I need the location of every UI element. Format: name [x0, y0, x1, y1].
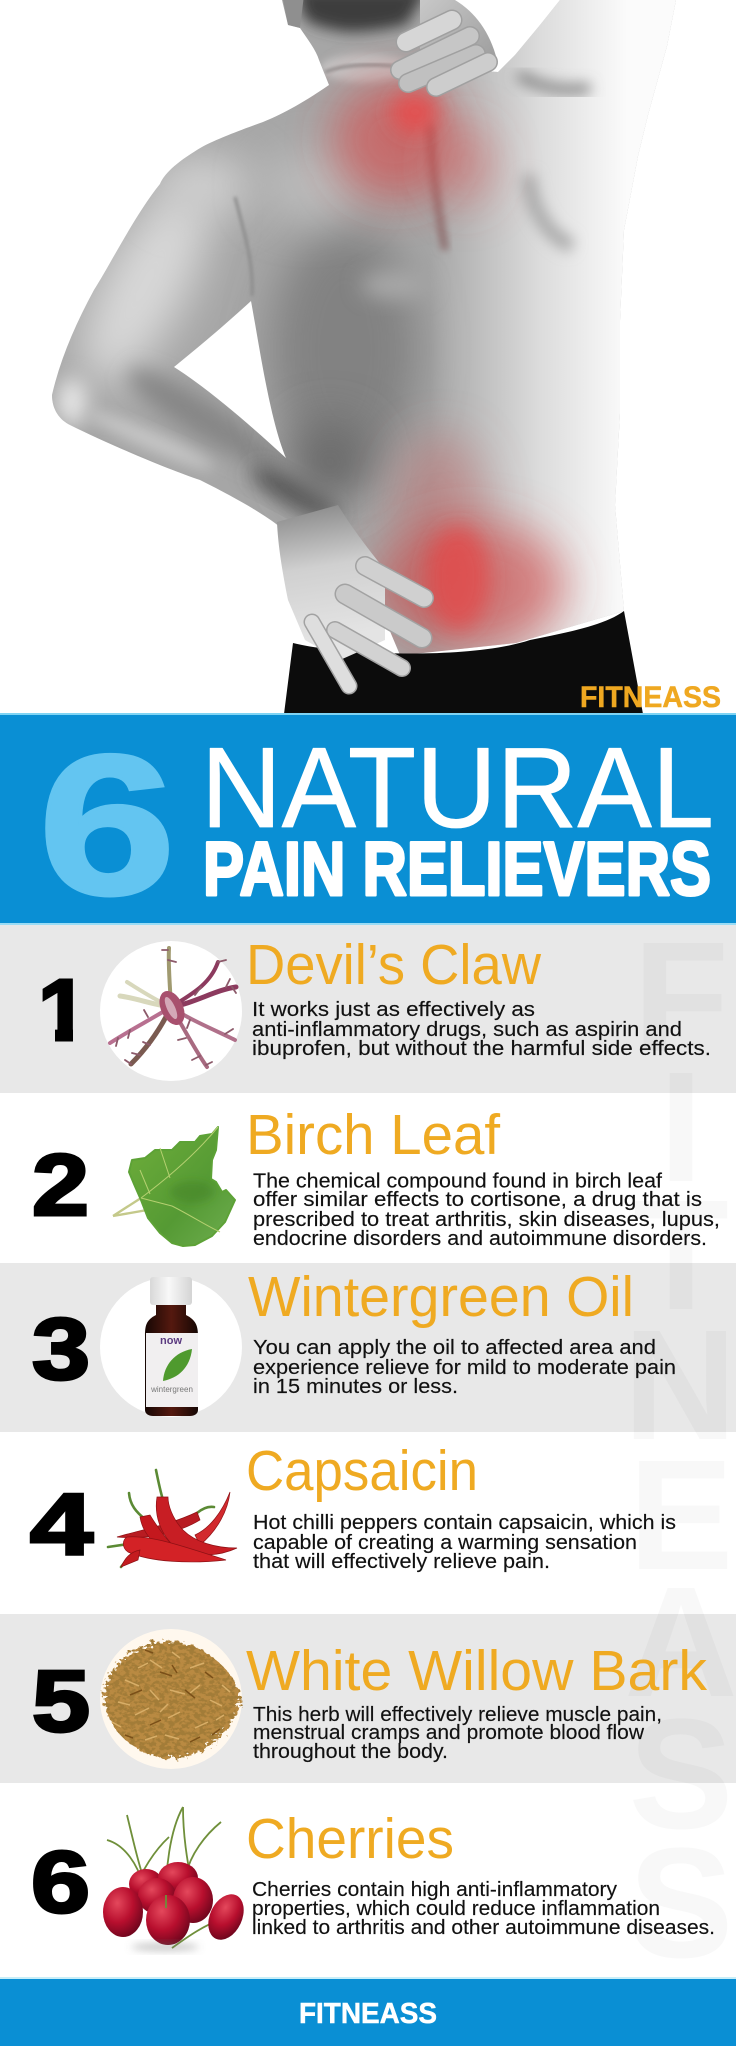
description: linked to arthritis and other autoimmune diseases.	[252, 1916, 715, 1939]
icon: red chilli peppers	[108, 1470, 237, 1567]
description: This herb will effectively relieve muscle pain,	[253, 1703, 662, 1726]
background vertical watermark letters: A	[624, 1555, 736, 1730]
row band 1	[0, 925, 736, 1093]
item 1: Devil's Claw	[26, 933, 711, 1081]
description: properties, which could reduce inflammation	[252, 1897, 660, 1920]
icon: wintergreen oil bottle	[100, 1277, 242, 1417]
background vertical watermark letters: E	[629, 1428, 733, 1603]
photo: upper hand on neck	[400, 0, 497, 87]
title: Devil’s Claw	[246, 933, 542, 997]
description: throughout the body.	[253, 1740, 448, 1763]
description: menstrual cramps and promote blood flow	[253, 1721, 644, 1744]
photo: black trousers	[284, 611, 643, 714]
description: The chemical compound found in birch leaf	[253, 1170, 662, 1192]
item 6: Cherries	[31, 1807, 715, 1951]
row band 5	[0, 1614, 736, 1783]
title: Birch Leaf	[246, 1103, 500, 1167]
item 4: Capsaicin	[30, 1439, 676, 1573]
icon: devil's claw plant	[100, 941, 242, 1081]
description: capable of creating a warming sensation	[253, 1531, 637, 1554]
watermark brand top right: FITNEASS	[580, 681, 721, 714]
icon: cherries	[103, 1807, 251, 1951]
description: offer similar effects to cortisone, a drug that is	[253, 1188, 702, 1211]
title: Wintergreen Oil	[248, 1265, 634, 1329]
number 1: 1	[38, 962, 88, 1059]
description: endocrine disorders and autoimmune disorders.	[253, 1227, 707, 1250]
number 5: 5	[32, 1653, 90, 1750]
background vertical watermark letters: S	[629, 1816, 733, 1991]
description	[253, 1170, 720, 1250]
item 2: Birch Leaf	[32, 1103, 720, 1250]
description: in 15 minutes or less.	[253, 1375, 458, 1398]
footer brand: FITNEASS	[299, 1998, 437, 2030]
background vertical watermark letters: S	[629, 1687, 733, 1862]
description	[253, 1703, 662, 1763]
description: You can apply the oil to affected area and	[253, 1336, 656, 1359]
description: It works just as effectively as	[252, 998, 535, 1021]
background vertical watermark letters: T	[633, 1168, 729, 1343]
background vertical watermark letters: I	[659, 1040, 703, 1215]
title: Cherries	[246, 1807, 454, 1871]
photo: lower hand on back	[277, 505, 424, 686]
background vertical watermark letters: F	[633, 910, 729, 1085]
icon: wintergreen oil bottle: now	[160, 1335, 182, 1347]
panel: blue title banner	[0, 713, 736, 937]
description	[253, 1336, 676, 1398]
number 3: 3	[32, 1301, 90, 1398]
description: that will effectively relieve pain.	[253, 1550, 550, 1573]
photo: gap between arm and torso	[174, 301, 286, 458]
item 5: White Willow Bark	[32, 1629, 707, 1769]
description: prescribed to treat arthritis, skin diseases, lupus,	[253, 1208, 720, 1231]
row band 3	[0, 1263, 736, 1432]
icon: birch leaf	[113, 1127, 235, 1246]
panel: blue footer	[0, 1977, 736, 2046]
big six: 6	[38, 714, 176, 937]
item 3: Wintergreen Oil	[32, 1265, 676, 1417]
photo: body with shading and red pain areas	[52, 0, 676, 654]
description	[252, 998, 711, 1060]
description: Cherries contain high anti-inflammatory	[252, 1878, 618, 1901]
hero photo: man holding his back	[40, 0, 690, 720]
heading: natural: NATURAL	[201, 725, 714, 852]
description	[253, 1511, 676, 1573]
description: anti-inflammatory drugs, such as aspirin and	[252, 1018, 682, 1041]
description: experience relieve for mild to moderate pain	[253, 1356, 676, 1379]
icon: willow bark pile	[100, 1629, 242, 1769]
background vertical watermark letters	[623, 910, 736, 1991]
description	[252, 1878, 715, 1939]
title: Capsaicin	[246, 1439, 478, 1503]
icon: wintergreen oil bottle: wintergreen	[150, 1385, 193, 1394]
description: ibuprofen, but without the harmful side effects.	[252, 1037, 711, 1060]
title: White Willow Bark	[246, 1639, 707, 1703]
number 2: 2	[32, 1137, 89, 1234]
number 4: 4	[30, 1476, 93, 1573]
number 6: 6	[31, 1834, 90, 1931]
description: Hot chilli peppers contain capsaicin, which is	[253, 1511, 676, 1534]
background vertical watermark letters: N	[623, 1298, 736, 1473]
